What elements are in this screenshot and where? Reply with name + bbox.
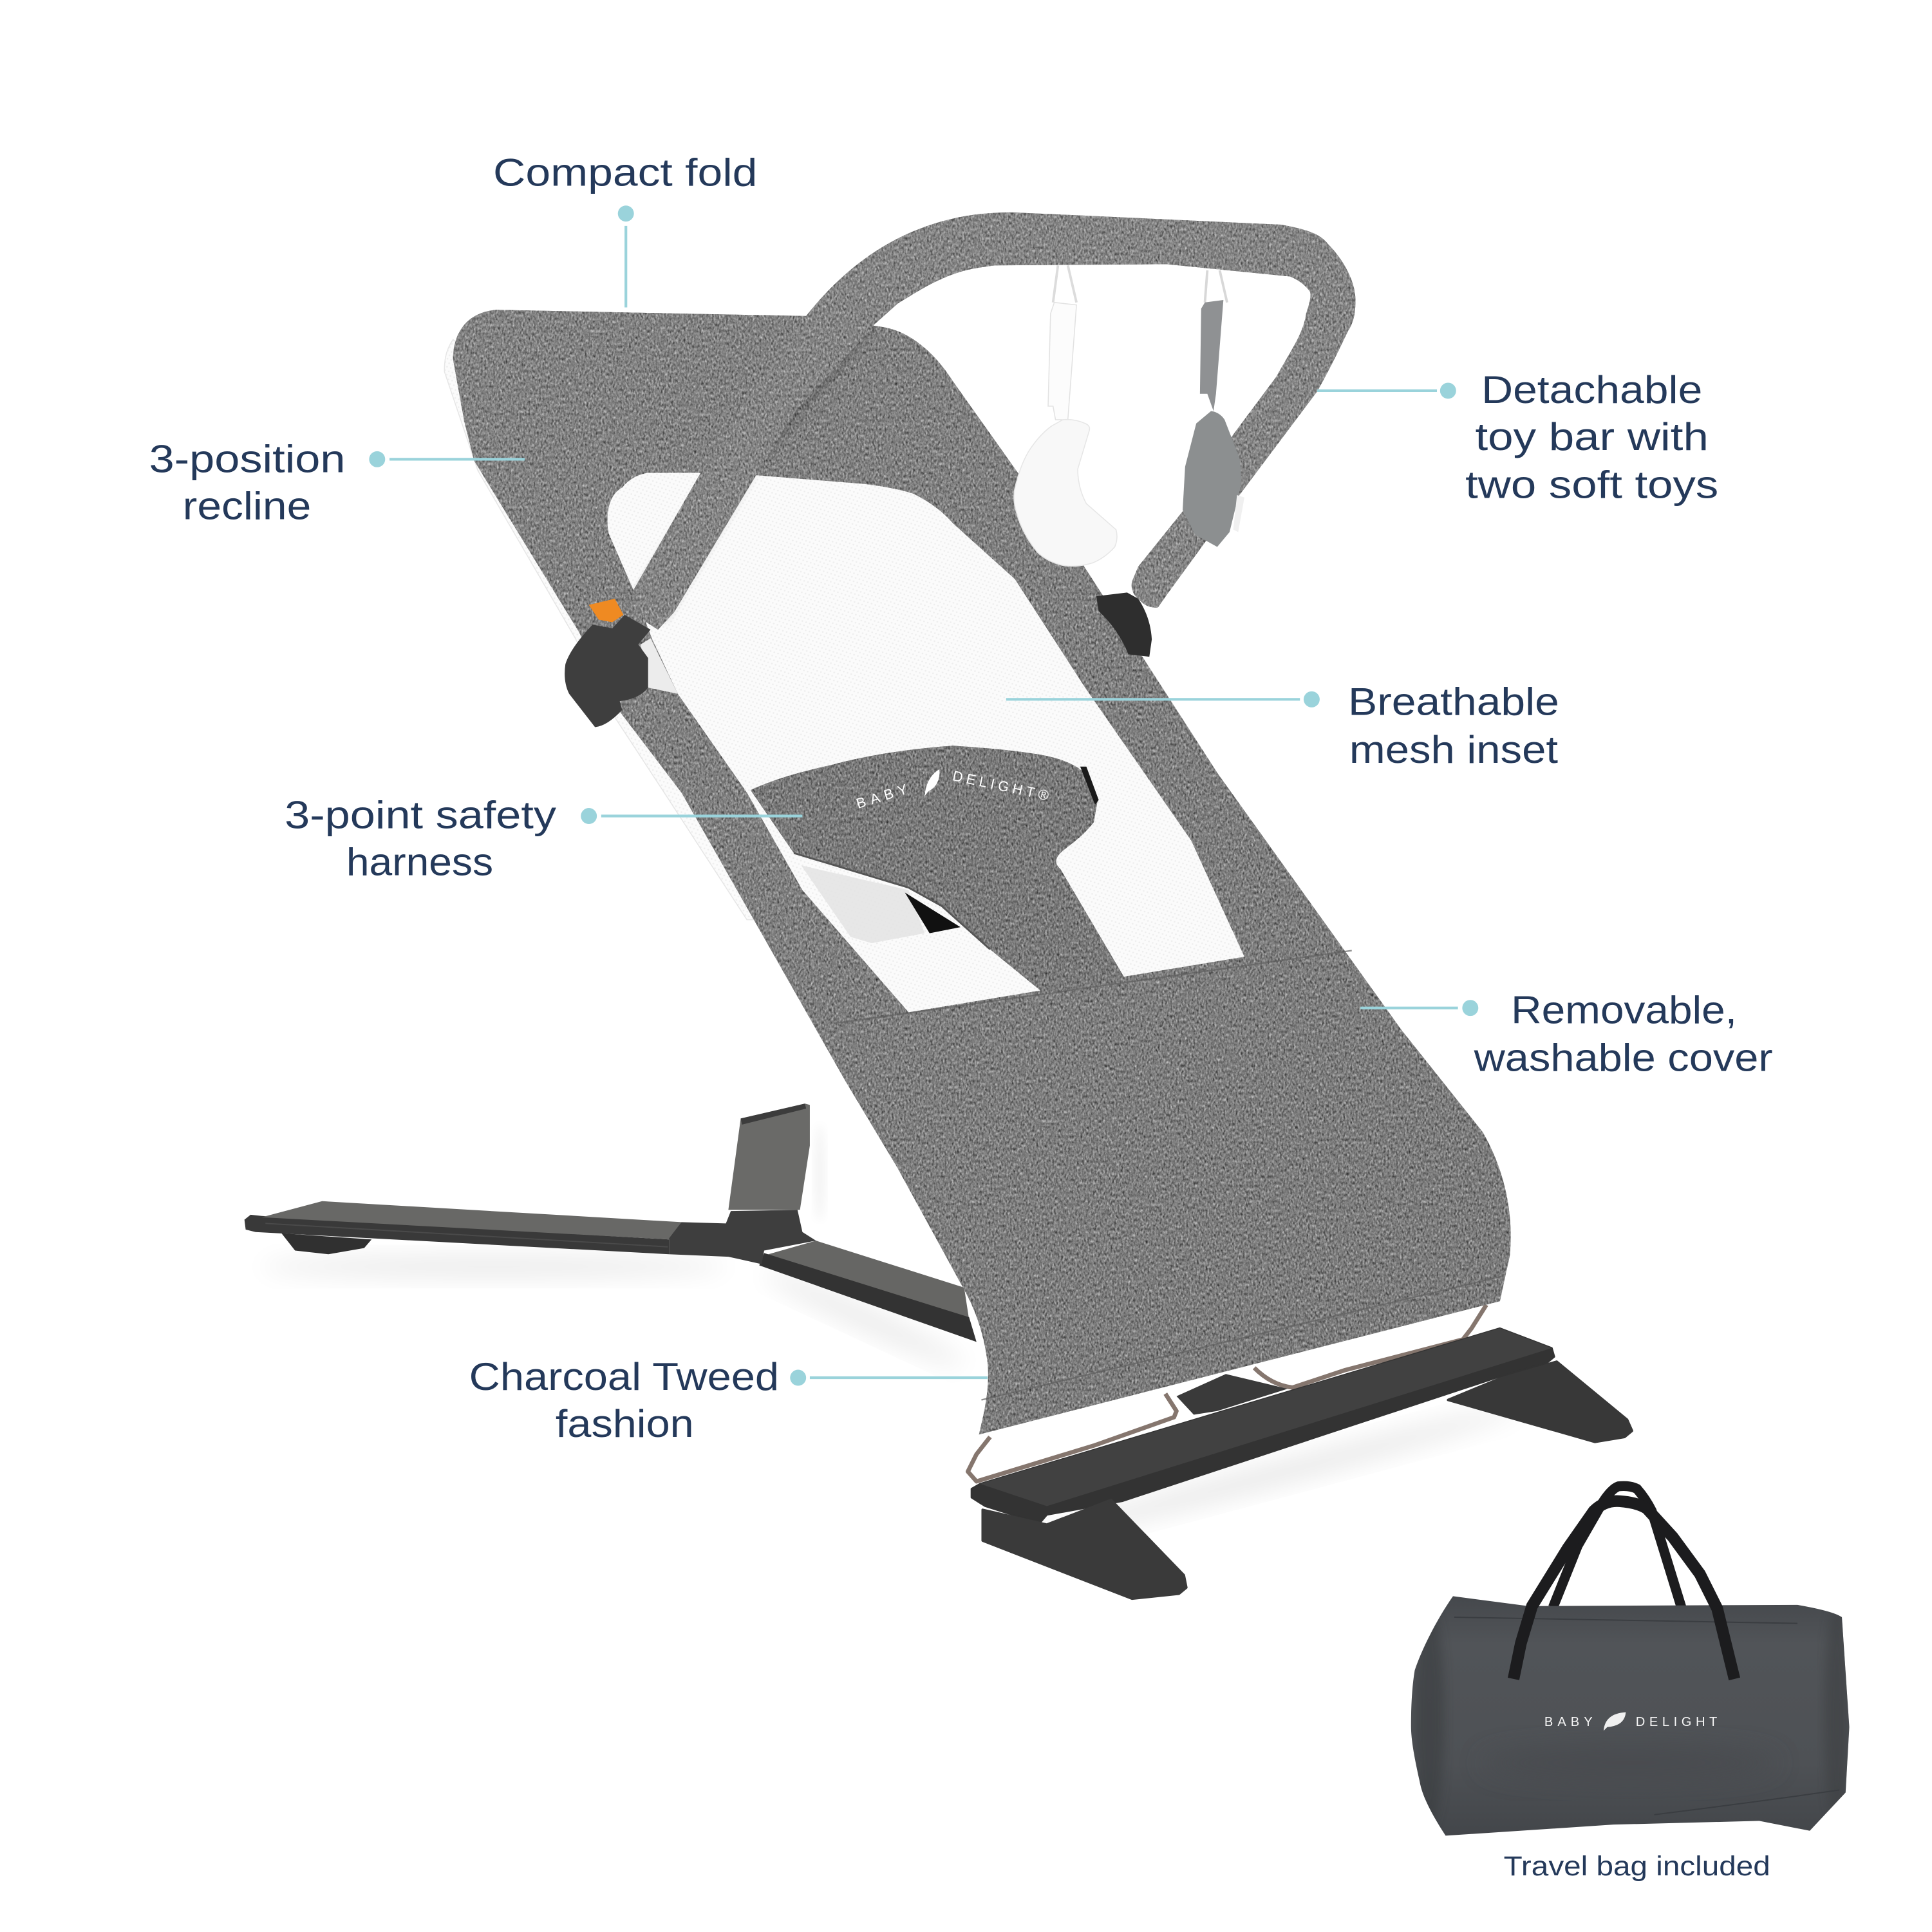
callout: 3-point safety harness: harness: [346, 841, 493, 884]
callout: breathable mesh inset: [1006, 680, 1559, 771]
callout: detachable toy bar: two soft toys: [1465, 463, 1718, 506]
harness seam: [794, 853, 990, 950]
mesh shadow: [802, 865, 924, 943]
callout: charcoal tweed fashion: Charcoal Tweed: [469, 1355, 779, 1398]
rear upright arm: [728, 1103, 810, 1210]
foot under left arm: [281, 1233, 371, 1254]
rear base frame: [245, 1103, 977, 1342]
callout: detachable toy bar: [1317, 368, 1718, 506]
callout: 3-position recline: recline: [183, 484, 311, 527]
hub: [669, 1210, 816, 1264]
harness logo: BABY: [854, 780, 914, 812]
callout: 3-point safety harness: 3-point safety: [285, 794, 556, 837]
toy: white moon: [1014, 265, 1117, 567]
warning tag: [589, 599, 623, 622]
callout: removable washable cover: Removable,: [1511, 989, 1737, 1032]
harness logo: [854, 767, 1054, 812]
callout: 3-position recline: 3-position: [149, 437, 346, 480]
callout: breathable mesh inset: mesh inset: [1349, 728, 1558, 771]
callout: breathable mesh inset: Breathable: [1348, 680, 1559, 723]
toy: grey star: [1183, 270, 1244, 547]
bag logo: [1544, 1712, 1717, 1730]
callout: detachable toy bar: Detachable: [1481, 368, 1702, 411]
bag body: [1411, 1596, 1850, 1835]
callout: charcoal tweed fashion: [469, 1355, 988, 1445]
left clip: [565, 615, 651, 727]
floor shadows: [259, 1123, 1525, 1553]
center support: [1176, 1374, 1288, 1415]
toy tag: [1233, 495, 1244, 532]
callout: compact fold: [493, 151, 757, 307]
callout: 3-point safety harness: [285, 794, 802, 884]
bag back handle: [1553, 1486, 1682, 1608]
right foot: [1448, 1362, 1632, 1442]
callout: detachable toy bar: toy bar with: [1475, 415, 1709, 458]
bag caption: Travel bag included: [1504, 1851, 1770, 1881]
bag logo: BABY: [1544, 1715, 1593, 1729]
safety harness pad: [751, 746, 1126, 994]
harness strap: [905, 892, 961, 933]
left arm: [245, 1215, 669, 1254]
fabric seat: [453, 310, 1511, 1434]
toy bar: [632, 212, 1355, 630]
fabric seams: [834, 951, 1501, 1400]
harness buckle: [1080, 767, 1099, 805]
care label: [641, 638, 678, 694]
travel bag: [1411, 1486, 1850, 1881]
toy bar shadow: [648, 308, 864, 611]
outer mesh edge: [444, 339, 771, 920]
front base bar: [971, 1328, 1554, 1523]
metal frame: [968, 1305, 1487, 1481]
mesh inset: [607, 473, 1244, 1012]
callout: compact fold: Compact fold: [493, 151, 757, 194]
left foot: [982, 1500, 1186, 1599]
callout: charcoal tweed fashion: fashion: [556, 1402, 694, 1445]
callout: 3-position recline: [149, 437, 525, 527]
callout: removable washable cover: washable cover: [1473, 1036, 1773, 1079]
product: bouncer seat: [245, 212, 1632, 1599]
harness logo: DELIGHT®: [951, 767, 1054, 805]
right clip: [1096, 592, 1152, 657]
bag front handle: [1514, 1501, 1734, 1679]
right arm: [764, 1241, 969, 1320]
bag logo: DELIGHT: [1636, 1715, 1717, 1729]
callout: removable washable cover: [1360, 989, 1773, 1079]
